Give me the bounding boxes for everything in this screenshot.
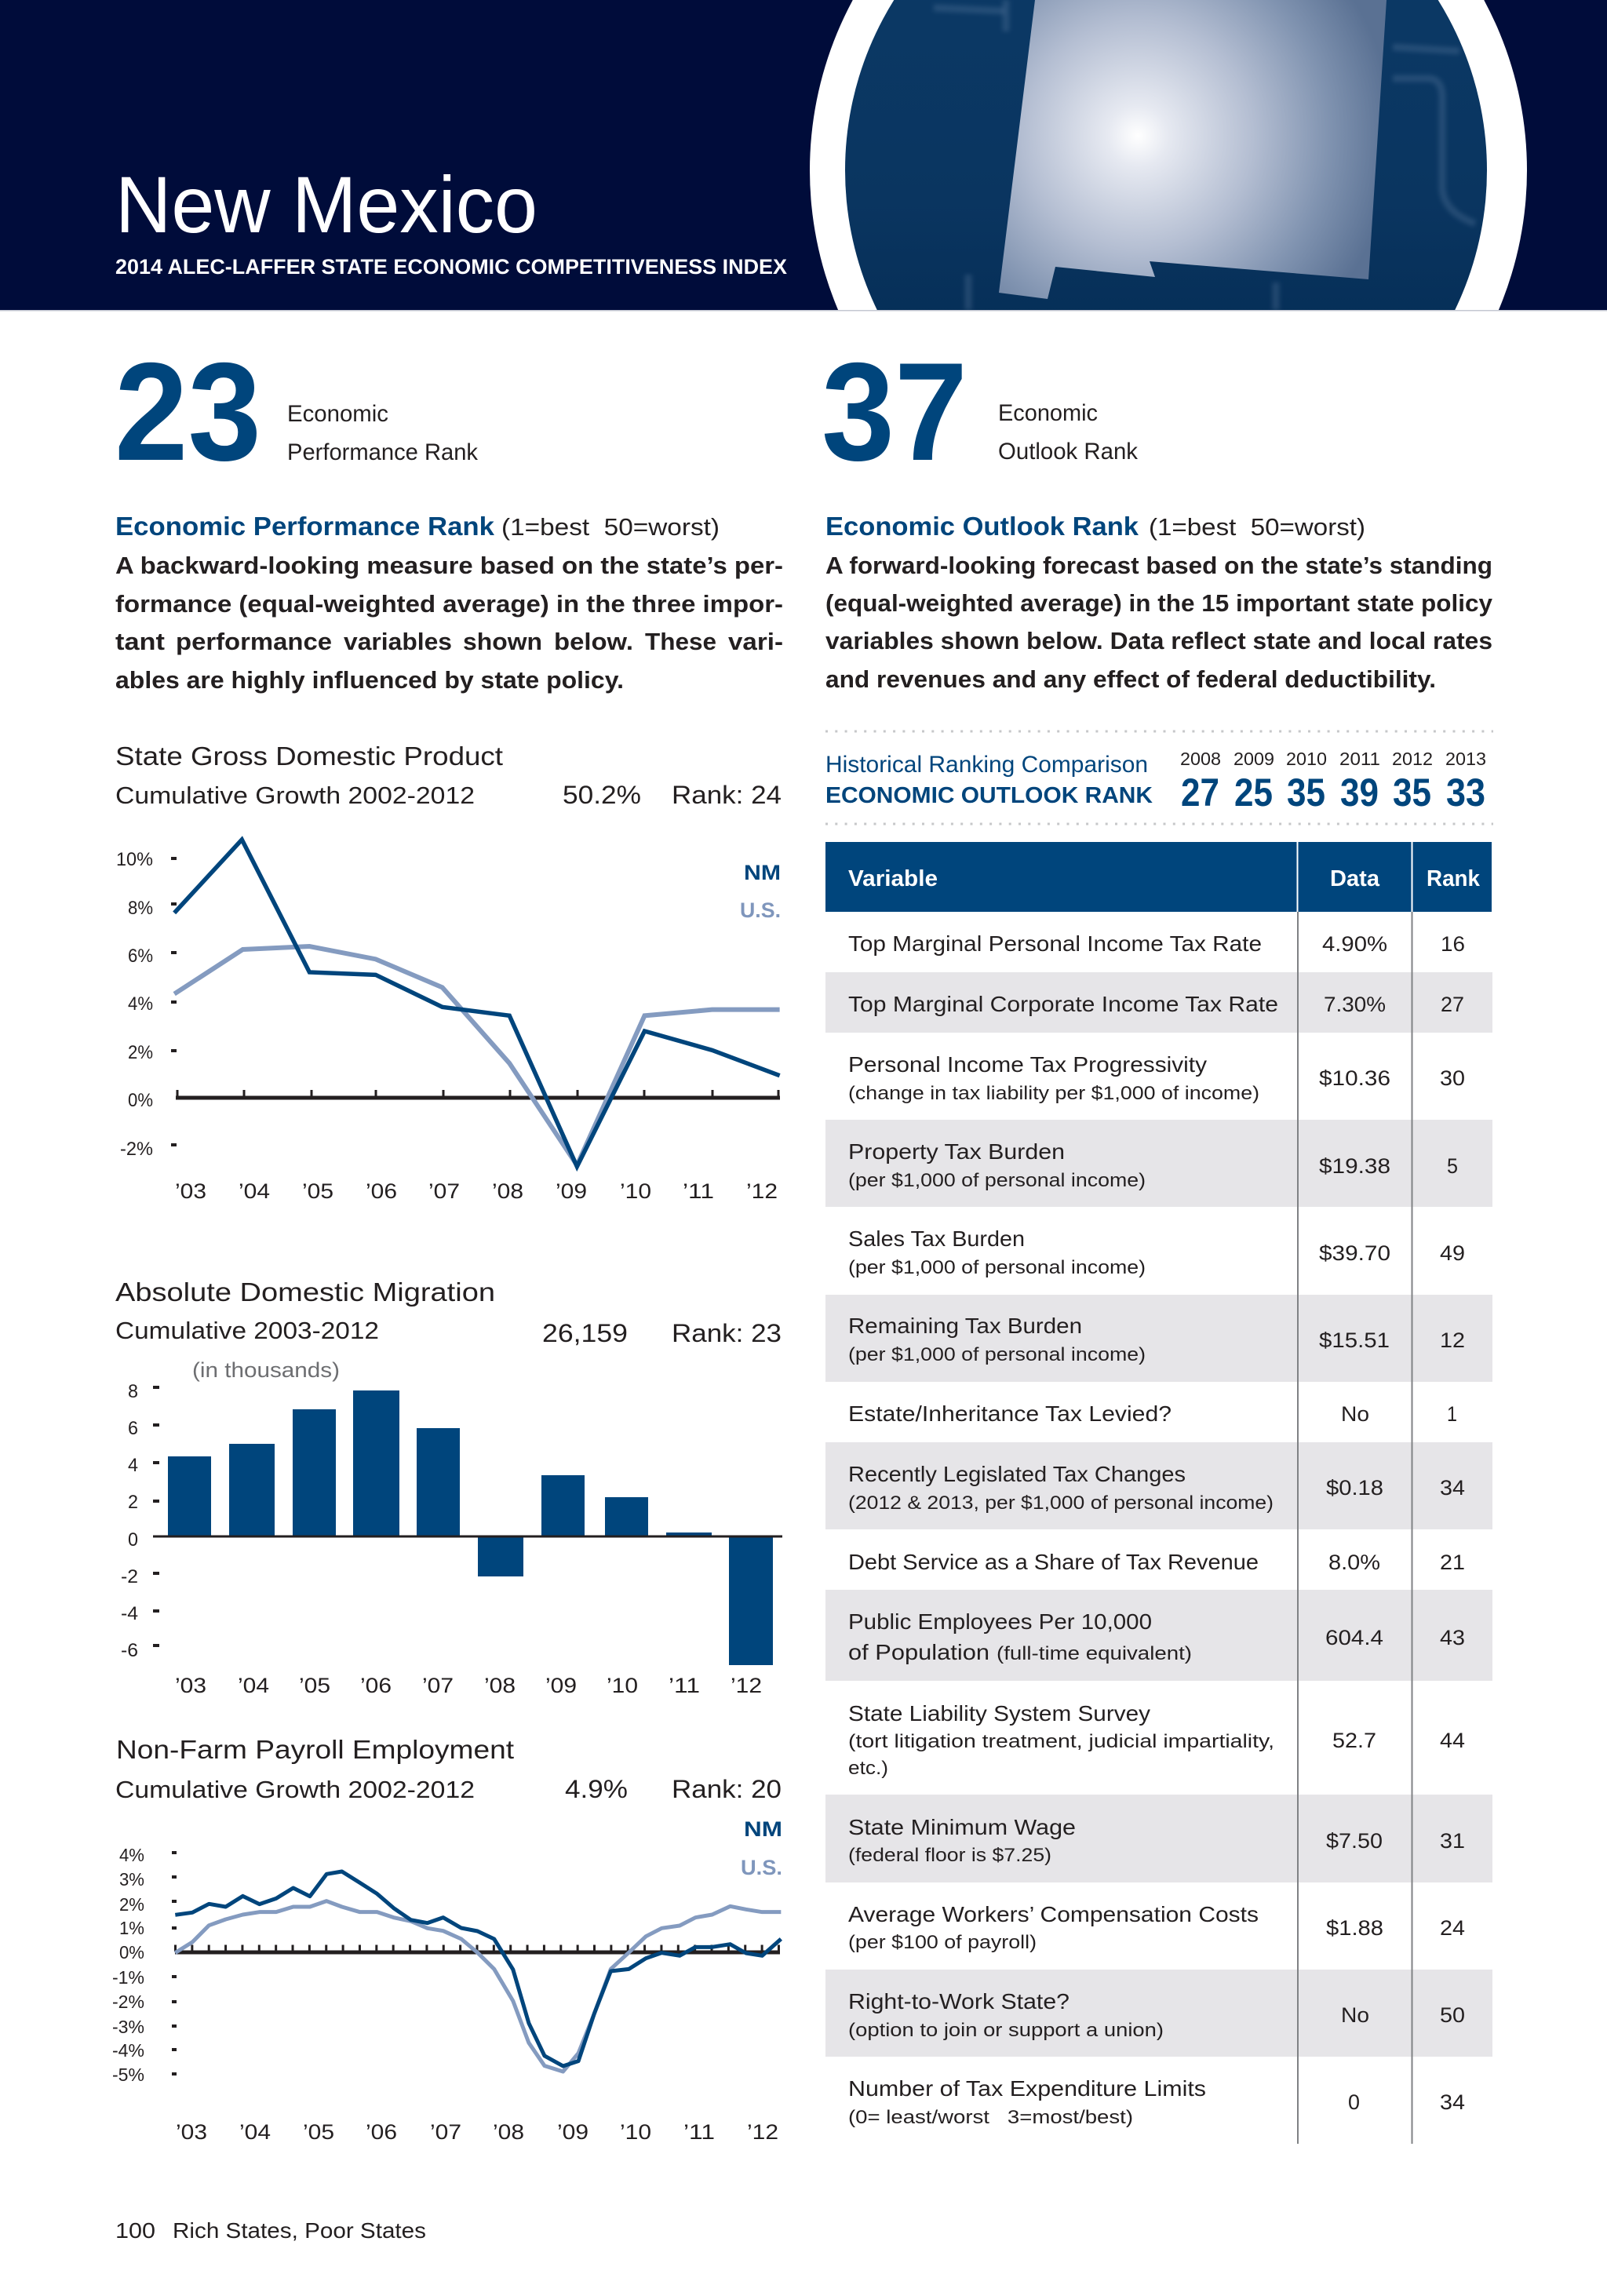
NM line xyxy=(174,840,780,1167)
comparison labels: ECONOMIC OUTLOOK RANK xyxy=(825,783,1153,808)
y axis: 4% xyxy=(128,993,153,1015)
row: public employees: Public Employees Per 10,000 xyxy=(848,1609,1152,1634)
row: right-to-work state: No xyxy=(1341,2003,1369,2027)
y axis: 6% xyxy=(128,946,153,967)
row: sales tax burden xyxy=(848,1226,1465,1278)
row: recently legislated tax changes xyxy=(848,1462,1465,1514)
y axis: 1% xyxy=(119,1918,144,1938)
years xyxy=(1180,749,1486,769)
row: estate/inheritance tax levied: 1 xyxy=(1447,1402,1457,1426)
table header: Variable xyxy=(848,866,938,891)
y axis: -5% xyxy=(112,2065,144,2085)
row: average workers compensation costs: Average Workers’ Compensation Costs xyxy=(848,1902,1259,1926)
y axis: 8 xyxy=(128,1381,138,1402)
row shading xyxy=(825,972,1492,2057)
yearly ranks xyxy=(1181,771,1485,815)
row: right-to-work state xyxy=(848,1989,1465,2041)
row: recently legislated tax changes: 34 xyxy=(1440,1476,1465,1500)
row: public employees: 604.4 xyxy=(1325,1626,1383,1649)
row: number of tax expenditure limits: (0= least/worst 3=most/best) xyxy=(848,2107,1133,2128)
y axis xyxy=(121,1381,159,1661)
x axis: ’11 xyxy=(683,2120,715,2144)
legend: U.S. xyxy=(740,898,781,922)
y axis: -6 xyxy=(121,1640,138,1661)
row: personal income tax progressivity: Personal Income Tax Progressivity xyxy=(848,1052,1207,1077)
row: sales tax burden: Sales Tax Burden xyxy=(848,1226,1025,1251)
y axis: 2% xyxy=(128,1042,153,1063)
chart heading: Absolute Domestic Migration xyxy=(115,1277,495,1307)
chart heading: 50.2% xyxy=(563,781,641,809)
row: state minimum wage: $7.50 xyxy=(1326,1829,1383,1853)
description text xyxy=(825,552,1493,693)
x axis: ’09 xyxy=(556,1179,587,1203)
legend: U.S. xyxy=(741,1856,782,1879)
U.S. line xyxy=(175,1901,781,2072)
legend xyxy=(741,1817,782,1879)
x axis: ’05 xyxy=(302,1179,333,1203)
bars xyxy=(168,1390,773,1665)
row: debt service: 21 xyxy=(1440,1551,1465,1574)
footer: 100 xyxy=(115,2218,155,2243)
row: top marginal personal income tax rate: 4.90% xyxy=(1322,932,1387,956)
x axis labels: ’07 xyxy=(422,1674,454,1697)
heading: (1=best 50=worst) xyxy=(1149,513,1365,541)
row: estate/inheritance tax levied xyxy=(848,1401,1457,1426)
row: average workers compensation costs: (per $100 of payroll) xyxy=(848,1932,1037,1953)
x axis: ’10 xyxy=(620,2120,651,2144)
x axis xyxy=(174,1948,781,2144)
x axis: ’06 xyxy=(366,1179,397,1203)
chart heading: Non-Farm Payroll Employment xyxy=(116,1735,514,1764)
y axis: 6 xyxy=(128,1418,138,1439)
row: state minimum wage xyxy=(848,1815,1465,1866)
y axis: -1% xyxy=(112,1967,144,1988)
row: top marginal corporate income tax rate: 27 xyxy=(1441,993,1464,1016)
chart heading: Cumulative 2003-2012 xyxy=(115,1317,379,1344)
panel: historical ranking comparison xyxy=(825,731,1493,824)
description text: variables xyxy=(344,628,452,655)
row: property tax burden xyxy=(848,1139,1458,1191)
row: personal income tax progressivity xyxy=(848,1052,1465,1104)
row: top marginal personal income tax rate: 16 xyxy=(1441,932,1465,956)
x axis labels: ’06 xyxy=(360,1674,392,1697)
row: property tax burden: $19.38 xyxy=(1319,1154,1390,1178)
description text: variables shown below. Data reflect state and local rates xyxy=(825,627,1492,654)
heading xyxy=(115,512,720,541)
row: average workers compensation costs xyxy=(848,1902,1465,1953)
table header: Rank xyxy=(1427,866,1481,891)
heading xyxy=(825,512,1365,541)
row: right-to-work state: (option to join or support a union) xyxy=(848,2020,1164,2041)
chart heading: 4.9% xyxy=(565,1775,628,1803)
y axis: 0 xyxy=(128,1529,138,1551)
description text: A backward-looking measure based on the state’s per- xyxy=(115,552,783,579)
chart heading: Rank: 23 xyxy=(672,1319,782,1347)
chart heading xyxy=(115,742,782,809)
y axis: -4 xyxy=(121,1603,138,1624)
footer: Rich States, Poor States xyxy=(173,2218,426,2243)
bar chart: migration xyxy=(121,1381,782,1697)
table header: Data xyxy=(1330,866,1380,891)
x axis: ’12 xyxy=(747,2120,778,2144)
description text: A forward-looking forecast based on the state’s standing xyxy=(825,552,1492,579)
y axis: -2 xyxy=(121,1566,138,1587)
row: right-to-work state: Right-to-Work State? xyxy=(848,1989,1070,2014)
x axis labels: ’12 xyxy=(731,1674,762,1697)
icon: New Mexico state shape xyxy=(999,0,1387,299)
yearly ranks: 35 xyxy=(1393,771,1431,815)
x axis: ’12 xyxy=(746,1179,778,1203)
description text xyxy=(115,552,783,694)
rank label xyxy=(287,401,479,465)
row: property tax burden: (per $1,000 of personal income) xyxy=(848,1170,1146,1191)
row: recently legislated tax changes: (2012 & 2013, per $1,000 of personal income) xyxy=(848,1492,1274,1514)
years: 2010 xyxy=(1286,749,1327,769)
row: number of tax expenditure limits: 0 xyxy=(1348,2090,1360,2114)
y axis: -2% xyxy=(112,1992,144,2012)
legend xyxy=(740,861,781,922)
row: remaining tax burden: $15.51 xyxy=(1319,1328,1390,1352)
description text: formance (equal-weighted average) in the three impor- xyxy=(115,590,783,618)
rank label: Economic xyxy=(998,400,1098,426)
row: top marginal corporate income tax rate xyxy=(848,992,1464,1016)
yearly ranks: 27 xyxy=(1181,771,1219,815)
description text: vari- xyxy=(728,628,783,655)
x axis labels: ’10 xyxy=(607,1674,638,1697)
y axis: 2% xyxy=(119,1894,144,1915)
heading: Economic Outlook Rank xyxy=(825,512,1139,541)
x axis: ’11 xyxy=(683,1179,714,1203)
x axis: ’04 xyxy=(239,1179,270,1203)
rank number 37: 37 xyxy=(822,333,967,490)
chart heading: Cumulative Growth 2002-2012 xyxy=(115,782,475,809)
row: sales tax burden: (per $1,000 of personal income) xyxy=(848,1257,1146,1278)
y axis: 0% xyxy=(119,1942,144,1963)
state map medallion xyxy=(810,0,1527,310)
row: average workers compensation costs: $1.88 xyxy=(1326,1916,1383,1940)
yearly ranks: 33 xyxy=(1446,771,1485,815)
row: number of tax expenditure limits: 34 xyxy=(1440,2090,1465,2114)
row: public employees: (full-time equivalent) xyxy=(997,1643,1192,1664)
row: sales tax burden: 49 xyxy=(1440,1241,1465,1265)
NM line xyxy=(175,1871,781,2066)
row: estate/inheritance tax levied: Estate/Inheritance Tax Levied? xyxy=(848,1401,1172,1426)
yearly ranks: 39 xyxy=(1340,771,1379,815)
rank label xyxy=(998,400,1139,465)
yearly ranks: 25 xyxy=(1234,771,1273,815)
x axis: ’07 xyxy=(428,1179,460,1203)
row: number of tax expenditure limits: Number of Tax Expenditure Limits xyxy=(848,2076,1206,2101)
y axis: 2 xyxy=(128,1492,138,1513)
chart heading xyxy=(115,1735,782,1803)
subtitle: 2014 ALEC-LAFFER STATE ECONOMIC COMPETITIVENESS INDEX xyxy=(115,255,787,279)
x axis xyxy=(175,1090,780,1203)
row: state liability system survey: 52.7 xyxy=(1332,1729,1376,1752)
x axis: ’03 xyxy=(175,1179,206,1203)
years: 2011 xyxy=(1339,749,1380,769)
row: personal income tax progressivity: (change in tax liability per $1,000 of income) xyxy=(848,1083,1259,1104)
row: sales tax burden: $39.70 xyxy=(1319,1241,1390,1265)
years: 2013 xyxy=(1445,749,1486,769)
row: remaining tax burden: 12 xyxy=(1440,1328,1465,1352)
header banner xyxy=(0,0,1607,311)
row: top marginal corporate income tax rate: Top Marginal Corporate Income Tax Rate xyxy=(848,992,1278,1016)
row: debt service xyxy=(848,1550,1465,1574)
row: state liability system survey: State Liability System Survey xyxy=(848,1701,1150,1726)
x axis: ’09 xyxy=(557,2120,589,2144)
row: debt service: 8.0% xyxy=(1328,1551,1380,1574)
row: recently legislated tax changes: Recently Legislated Tax Changes xyxy=(848,1462,1186,1486)
x axis: ’03 xyxy=(176,2120,207,2144)
description text: and revenues and any effect of federal deductibility. xyxy=(825,665,1436,693)
x axis: ’08 xyxy=(493,2120,524,2144)
description text: ables are highly influenced by state policy. xyxy=(115,666,624,694)
row: property tax burden: Property Tax Burden xyxy=(848,1139,1065,1164)
row: public employees: of Population xyxy=(848,1640,989,1664)
x axis labels: ’03 xyxy=(175,1674,206,1697)
row: state liability system survey xyxy=(848,1701,1465,1779)
heading: (1=best 50=worst) xyxy=(501,513,720,541)
row: state minimum wage: (federal floor is $7.25) xyxy=(848,1845,1051,1866)
rank label: Performance Rank xyxy=(287,439,479,465)
rank label: Economic xyxy=(287,401,388,427)
chart heading: State Gross Domestic Product xyxy=(115,742,503,771)
chart heading: Rank: 20 xyxy=(672,1775,782,1803)
panel: economic outlook rank xyxy=(822,333,1493,693)
y axis: 0% xyxy=(128,1090,153,1111)
panel: economic performance rank xyxy=(115,333,783,694)
legend: NM xyxy=(744,861,781,884)
y axis: -3% xyxy=(112,2017,144,2037)
comparison labels xyxy=(825,752,1153,808)
y axis: 10% xyxy=(116,849,153,870)
heading: Economic Performance Rank xyxy=(115,512,495,541)
row: average workers compensation costs: 24 xyxy=(1440,1916,1465,1940)
row: property tax burden: 5 xyxy=(1447,1154,1458,1178)
panel: absolute domestic migration xyxy=(115,1277,782,1697)
chart heading xyxy=(115,1277,782,1347)
row: remaining tax burden xyxy=(848,1314,1465,1365)
x axis labels: ’05 xyxy=(299,1674,330,1697)
years: 2009 xyxy=(1233,749,1274,769)
description text: These xyxy=(645,628,716,655)
row: public employees: 43 xyxy=(1440,1626,1465,1649)
y axis: 3% xyxy=(119,1869,144,1890)
row: debt service: Debt Service as a Share of Tax Revenue xyxy=(848,1550,1259,1574)
chart heading: 26,159 xyxy=(542,1319,628,1347)
y axis xyxy=(116,849,177,1160)
x axis: ’10 xyxy=(620,1179,651,1203)
y axis: 8% xyxy=(128,898,153,919)
U.S. line xyxy=(174,946,780,1165)
years: 2012 xyxy=(1392,749,1433,769)
y axis: -2% xyxy=(120,1139,153,1160)
rank label: Outlook Rank xyxy=(998,439,1139,465)
row: remaining tax burden: (per $1,000 of personal income) xyxy=(848,1344,1146,1365)
row: recently legislated tax changes: $0.18 xyxy=(1326,1476,1383,1500)
y axis: -4% xyxy=(112,2040,144,2061)
row: top marginal corporate income tax rate: 7.30% xyxy=(1324,993,1386,1016)
row: public employees xyxy=(848,1609,1465,1664)
units note: (in thousands) xyxy=(192,1358,340,1382)
table header xyxy=(825,842,1492,912)
title: New Mexico xyxy=(115,160,537,250)
row: state liability system survey: (tort litigation treatment, judicial impartiality, xyxy=(848,1731,1274,1752)
legend: NM xyxy=(744,1817,782,1841)
row: personal income tax progressivity: 30 xyxy=(1440,1066,1465,1090)
description text: shown xyxy=(463,628,542,655)
row: state liability system survey: 44 xyxy=(1440,1729,1465,1752)
row: remaining tax burden: Remaining Tax Burden xyxy=(848,1314,1082,1338)
description text: performance xyxy=(176,628,332,655)
years: 2008 xyxy=(1180,749,1221,769)
x axis labels xyxy=(175,1674,762,1697)
yearly ranks: 35 xyxy=(1287,771,1325,815)
y axis: 4% xyxy=(119,1845,144,1865)
x axis labels: ’09 xyxy=(545,1674,577,1697)
panel: state gross domestic product xyxy=(115,742,782,1203)
comparison labels: Historical Ranking Comparison xyxy=(825,752,1148,778)
x axis labels: ’11 xyxy=(669,1674,700,1697)
row: estate/inheritance tax levied: No xyxy=(1341,1402,1369,1426)
y axis xyxy=(112,1845,177,2085)
chart heading: Cumulative Growth 2002-2012 xyxy=(115,1776,475,1803)
description text: (equal-weighted average) in the 15 important state policy xyxy=(825,589,1493,617)
y axis: 4 xyxy=(128,1455,138,1476)
panel: variables table xyxy=(825,842,1492,2144)
row: state liability system survey: etc.) xyxy=(848,1758,888,1779)
row: right-to-work state: 50 xyxy=(1440,2003,1465,2027)
row: number of tax expenditure limits xyxy=(848,2076,1465,2128)
row: state minimum wage: 31 xyxy=(1440,1829,1465,1853)
line chart: GDP growth xyxy=(116,840,781,1203)
x axis: ’04 xyxy=(239,2120,271,2144)
row: top marginal personal income tax rate: Top Marginal Personal Income Tax Rate xyxy=(848,931,1262,956)
chart heading: Rank: 24 xyxy=(672,781,782,809)
line chart: payroll employment xyxy=(112,1817,782,2144)
rank number 23: 23 xyxy=(115,333,261,490)
row: top marginal personal income tax rate xyxy=(848,931,1465,956)
x axis: ’05 xyxy=(303,2120,334,2144)
row: state minimum wage: State Minimum Wage xyxy=(848,1815,1076,1839)
panel: non-farm payroll employment xyxy=(112,1735,782,2144)
x axis: ’08 xyxy=(492,1179,523,1203)
row: personal income tax progressivity: $10.36 xyxy=(1319,1066,1390,1090)
x axis labels: ’04 xyxy=(238,1674,269,1697)
x axis labels: ’08 xyxy=(484,1674,516,1697)
description text: below. xyxy=(554,628,633,655)
description text: tant xyxy=(115,628,165,655)
x axis: ’06 xyxy=(366,2120,397,2144)
x axis: ’07 xyxy=(430,2120,461,2144)
